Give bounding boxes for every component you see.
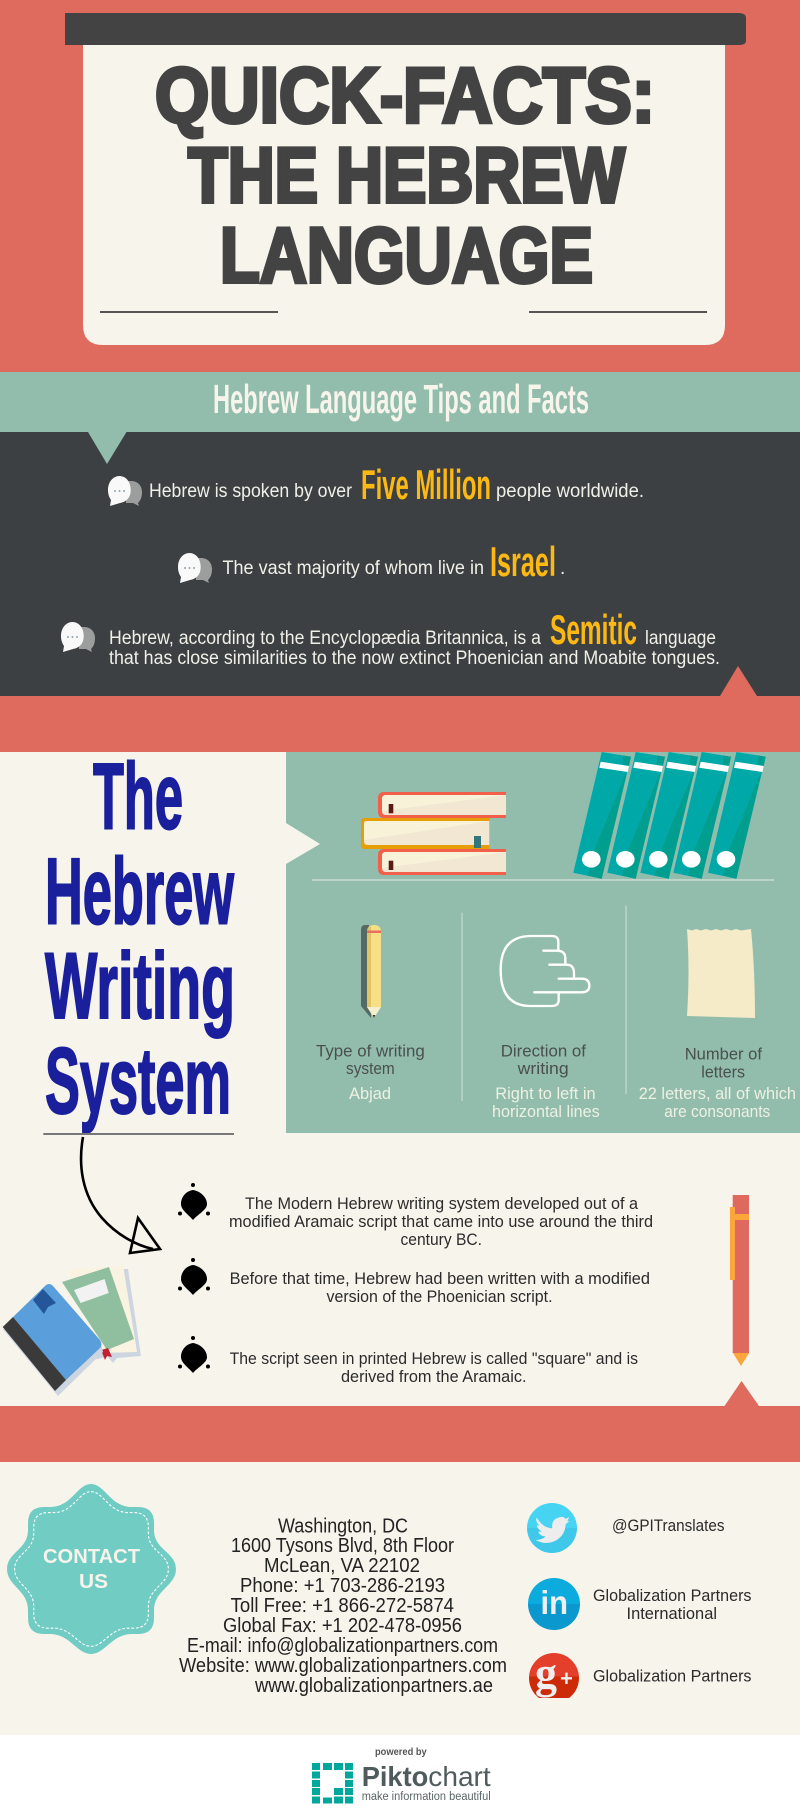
title: QUICK-FACTS:	[155, 51, 655, 139]
red pointer	[724, 1381, 759, 1406]
icon: five binders	[573, 752, 766, 879]
cream pointer	[286, 823, 320, 864]
column: direction of writing	[492, 936, 600, 1121]
heading: The Hebrew Writing System: Writing	[45, 933, 235, 1038]
text block: contact address: McLean, VA 22102	[264, 1555, 420, 1577]
bullet: marker 3	[178, 1336, 210, 1373]
footer: powered by Piktochart	[312, 1746, 491, 1804]
title rules	[100, 311, 707, 313]
fact 2	[178, 538, 565, 585]
social: linkedin	[528, 1578, 752, 1630]
badge: contact us	[7, 1484, 176, 1654]
shelf and column dividers	[312, 879, 774, 1101]
title: THE HEBREW	[188, 131, 625, 219]
icon: speech bubbles	[178, 553, 212, 583]
column: number of letters: Number of	[685, 1044, 762, 1063]
heading: The Hebrew Writing System: Hebrew	[45, 838, 234, 943]
column: direction of writing: Right to left in	[495, 1084, 596, 1103]
text block: writing system history: Before that time, Hebrew had been written with a modified	[230, 1269, 650, 1288]
icon: Piktochart logo mark	[312, 1763, 353, 1804]
icon: google plus: +	[560, 1666, 573, 1691]
icon: google plus	[529, 1653, 579, 1698]
text block: writing system history: modified Aramaic script that came into use around the third	[229, 1212, 653, 1231]
wordmark	[362, 1761, 491, 1792]
bullet: marker 1	[178, 1183, 210, 1220]
icon: hand pointing right	[501, 936, 589, 1006]
column: direction of writing: writing	[517, 1059, 569, 1078]
text block: writing system history: version of the Phoenician script.	[326, 1287, 552, 1306]
column: type of writing system: system	[346, 1059, 395, 1078]
text block: writing system history	[178, 1183, 653, 1386]
fact 3: Hebrew, according to the Encyclopædia Britannica, is a	[109, 628, 541, 649]
column: number of letters: letters	[701, 1062, 745, 1081]
column: direction of writing: horizontal lines	[492, 1102, 600, 1121]
fact 3: language	[645, 628, 716, 649]
text block: contact address	[179, 1515, 507, 1697]
fact 2: Israel	[490, 538, 556, 585]
badge: contact us: US	[79, 1571, 108, 1593]
icon: red pen	[730, 1195, 749, 1366]
footer: powered by Piktochart: powered by	[375, 1746, 427, 1758]
icon: notebooks illustration	[3, 1265, 141, 1396]
icon: sheet of paper	[687, 929, 755, 1018]
middle book	[361, 818, 489, 849]
fact 3	[61, 606, 720, 669]
fact 2: The vast majority of whom live in	[222, 558, 484, 579]
header panel: paper sign with title	[65, 13, 746, 345]
social: twitter	[527, 1503, 724, 1553]
icon: google plus: g	[535, 1649, 557, 1698]
dark top bar	[65, 13, 746, 45]
text block: contact address: Phone: +1 703-286-2193	[240, 1575, 445, 1597]
text block: writing system history: derived from the Aramaic.	[341, 1367, 526, 1386]
text block: contact address: Toll Free: +1 866-272-5874	[231, 1595, 454, 1617]
column: number of letters: 22 letters, all of which	[639, 1084, 796, 1103]
top book	[378, 792, 506, 818]
title	[155, 51, 655, 299]
column: number of letters	[639, 929, 796, 1121]
fact 1: Hebrew is spoken by over	[149, 481, 353, 502]
icon: linkedin: in	[540, 1584, 568, 1621]
social: google plus	[529, 1653, 751, 1698]
column: number of letters: are consonants	[664, 1102, 770, 1121]
fact 3: Semitic	[550, 606, 637, 653]
bullet: marker 2	[178, 1258, 210, 1295]
icon: twitter	[527, 1503, 577, 1553]
fact 2: .	[560, 558, 565, 579]
teal pointer	[88, 432, 126, 464]
footer: powered by Piktochart: make information beautiful	[362, 1791, 491, 1803]
heading: The Hebrew Writing System: System	[45, 1028, 231, 1133]
social: twitter: @GPITranslates	[612, 1517, 724, 1535]
icon: speech bubbles	[61, 622, 95, 652]
text block: contact address: www.globalizationpartners.ae	[254, 1675, 493, 1697]
fact 1: Five Million	[361, 461, 491, 508]
panel: language facts	[0, 432, 800, 696]
wordmark: chart	[428, 1761, 491, 1792]
social: linkedin: International	[626, 1605, 717, 1623]
badge: contact us: CONTACT	[43, 1546, 140, 1568]
bottom book	[378, 849, 506, 875]
icon: speech bubbles	[108, 476, 142, 506]
icon: pencil	[361, 925, 381, 1018]
panel: writing system details	[286, 752, 800, 1133]
red pointer	[720, 666, 757, 696]
icon: linkedin	[528, 1578, 580, 1630]
social: google plus: Globalization Partners	[593, 1668, 752, 1686]
text block: contact address: Website: www.globalizationpartners.com	[179, 1655, 507, 1677]
wordmark: Pikto	[362, 1761, 428, 1792]
social: linkedin: Globalization Partners	[593, 1587, 752, 1605]
text block: writing system history: The Modern Hebrew writing system developed out of a	[245, 1194, 639, 1213]
title: LANGUAGE	[220, 211, 593, 299]
fact 3: that has close similarities to the now extinct Phoenician and Moabite tongues.	[109, 648, 720, 669]
text block: contact address: E-mail: info@globalizationpartners.com	[187, 1635, 498, 1657]
text block: writing system history: The script seen in printed Hebrew is called "square" and is	[230, 1349, 638, 1368]
icon: stack of books	[361, 792, 506, 875]
fact 1	[108, 461, 644, 508]
text block: contact address: 1600 Tysons Blvd, 8th Floor	[231, 1535, 454, 1557]
column: type of writing system	[316, 925, 425, 1103]
column: type of writing system: Type of writing	[316, 1042, 425, 1061]
text block: writing system history: century BC.	[400, 1230, 482, 1249]
paper sheet	[83, 45, 725, 345]
heading: The Hebrew Writing System	[43, 743, 235, 1135]
column: direction of writing: Direction of	[501, 1042, 586, 1061]
column: type of writing system: Abjad	[349, 1084, 391, 1103]
text block: contact address: Global Fax: +1 202-478-0956	[223, 1615, 462, 1637]
fact 1: people worldwide.	[496, 481, 644, 502]
heading: The Hebrew Writing System: The	[93, 743, 183, 848]
heading band: Hebrew Language Tips and Facts	[0, 372, 800, 432]
arrow: hand-drawn curved arrow	[81, 1137, 160, 1253]
text block: contact address: Washington, DC	[278, 1515, 408, 1537]
